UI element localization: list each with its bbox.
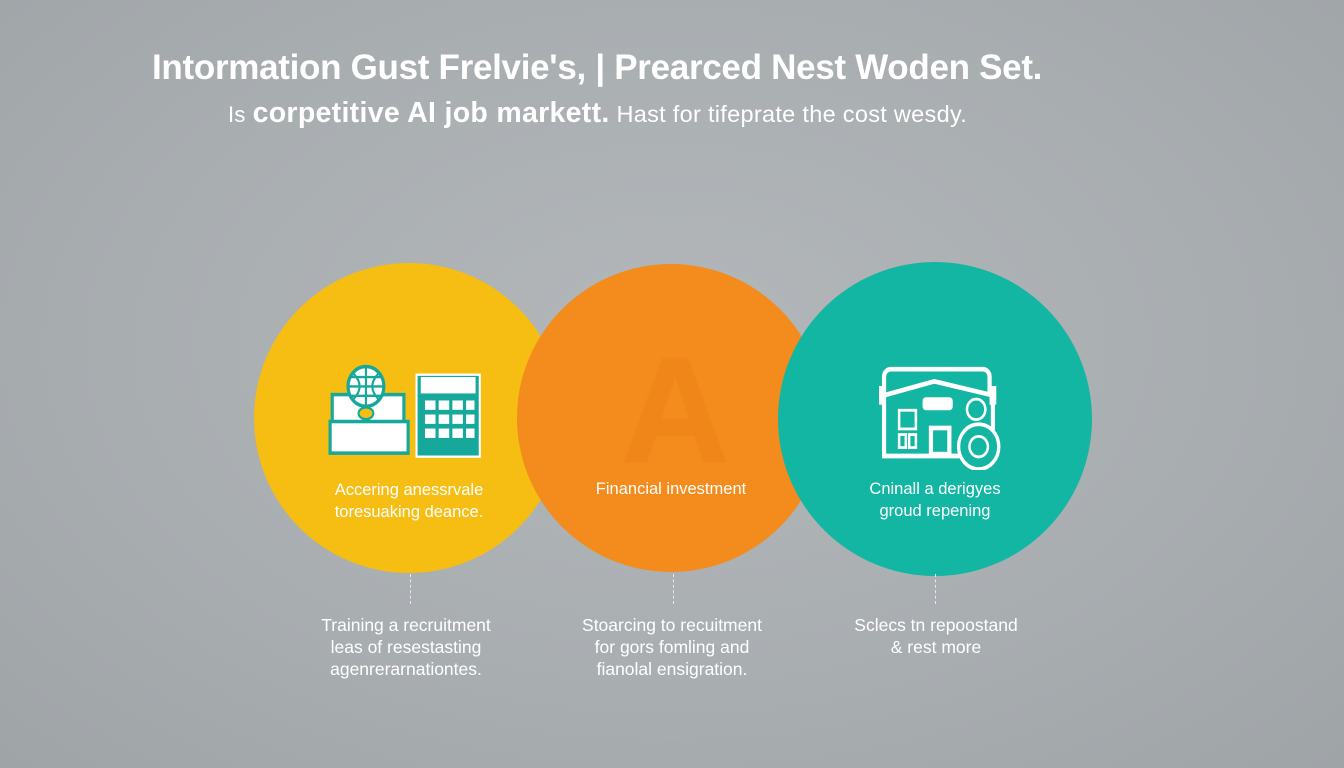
- title: Intormation Gust Frelvie's, | Prearced Nest Woden Set.: [152, 48, 1042, 87]
- circle: teal: [778, 262, 1092, 576]
- caption: [869, 480, 1001, 520]
- caption: groud repening: [879, 502, 990, 520]
- caption: Accering anessrvale: [335, 481, 483, 499]
- caption: Financial investment: [596, 480, 746, 498]
- text: column 3: Sclecs tn repoostand: [854, 615, 1018, 635]
- text: column 2: for gors fomling and: [595, 637, 749, 657]
- connectors: [410, 574, 936, 604]
- text: column 1: [321, 615, 491, 679]
- circle: yellow: [254, 263, 564, 573]
- circle: orange: [517, 264, 825, 572]
- text: column 2: fianolal ensigration.: [597, 659, 747, 679]
- subtitle: Is corpetitive AI job markett. Hast for tifeprate the cost wesdy.: [228, 97, 967, 129]
- icon: faint letter A: A: [621, 326, 729, 494]
- text: column 1: agenrerarnationtes.: [330, 659, 482, 679]
- text: column 1: Training a recruitment: [321, 615, 491, 635]
- text: column 1: leas of resestasting: [331, 637, 481, 657]
- icon: globe and calendar: [328, 364, 481, 458]
- caption: [334, 481, 483, 521]
- icon: radio device: [879, 366, 1000, 470]
- text: column 2: [582, 615, 762, 679]
- caption: Cninall a derigyes: [869, 480, 1001, 498]
- text: column 3: & rest more: [891, 637, 981, 657]
- text: column 3: [854, 615, 1018, 657]
- text: column 2: Stoarcing to recuitment: [582, 615, 762, 635]
- caption: toresuaking deance.: [335, 503, 483, 521]
